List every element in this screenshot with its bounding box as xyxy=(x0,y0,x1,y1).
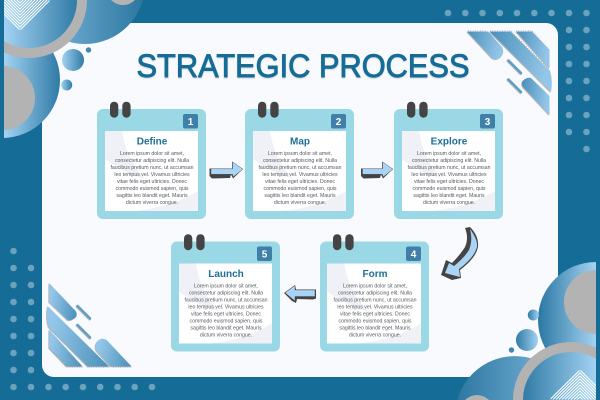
step 4 card: Form: leo tempus vel. Vivamus ultricies xyxy=(337,304,413,310)
step 1 card: Define xyxy=(97,102,206,219)
step 2 card: Map: faucibus pretium nunc, ut accumsan xyxy=(258,165,342,171)
step 2 card: Map: 2 xyxy=(336,117,342,128)
title: STRATEGIC PROCESS xyxy=(136,48,470,84)
step 4 card: Form: dictum viverra congue. xyxy=(349,332,401,338)
step 4 card: Form: consectetur adipiscing elit. Nulla xyxy=(338,290,412,296)
step 5 card: Launch: Lorem ipsum dolor sit amet, xyxy=(194,284,258,290)
step 1 card: Define: vitae felis eget ultricies. Donec xyxy=(117,179,187,185)
arrow: step 1 to step 2 xyxy=(210,162,243,178)
step 1 card: Define: commodo euismod sapien, quis xyxy=(116,186,189,192)
step 2 card: Map xyxy=(245,102,354,219)
step 1 card: Define: consectetur adipiscing elit. Nulla xyxy=(115,158,189,164)
step 1 card: Define: leo tempus vel. Vivamus ultricies xyxy=(114,172,190,178)
step 3 card: Explore: leo tempus vel. Vivamus ultricies xyxy=(411,172,487,178)
step 4 card: Form xyxy=(320,234,429,352)
step 4 card: Form: Form xyxy=(362,269,388,280)
step 2 card: Map: vitae felis eget ultricies. Donec xyxy=(265,179,335,185)
step 5 card: Launch xyxy=(171,234,280,352)
decoration: top left circles xyxy=(0,0,145,138)
step 5 card: Launch: commodo euismod sapien, quis xyxy=(190,318,263,324)
step 1 card: Define: Lorem ipsum dolor sit amet, xyxy=(120,151,184,157)
step 2 card: Map: sagittis leo blandit eget. Mauris xyxy=(264,193,336,199)
step 3 card: Explore: dictum viverra congue. xyxy=(423,200,475,206)
step 4 card: Form: sagittis leo blandit eget. Mauris xyxy=(339,326,411,332)
step 3 card: Explore: Lorem ipsum dolor sit amet, xyxy=(417,151,481,157)
arrow: step 2 to step 3 xyxy=(361,162,393,178)
step 3 card: Explore: consectetur adipiscing elit. Nulla xyxy=(412,158,486,164)
decoration: bottom right circles xyxy=(457,262,596,400)
step 1 card: Define: sagittis leo blandit eget. Mauris xyxy=(116,193,188,199)
dots: bottom left xyxy=(10,248,155,390)
step 4 card: Form: Lorem ipsum dolor sit amet, xyxy=(343,284,407,290)
step 5 card: Launch: leo tempus vel. Vivamus ultricies xyxy=(188,304,264,310)
decoration: top left bubbles xyxy=(61,47,91,90)
step 4 card: Form: vitae felis eget ultricies. Donec xyxy=(340,312,410,318)
step 5 card: Launch: sagittis leo blandit eget. Mauris xyxy=(190,326,262,332)
arrow: step 3 to step 4 (curved) xyxy=(441,227,478,280)
step 1 card: Define: 1 xyxy=(188,117,194,128)
step 3 card: Explore: vitae felis eget ultricies. Donec xyxy=(414,179,484,185)
step 2 card: Map: leo tempus vel. Vivamus ultricies xyxy=(262,172,338,178)
decoration: bottom right bubbles xyxy=(509,310,539,353)
step 5 card: Launch: 5 xyxy=(262,250,268,260)
arrow: step 4 to step 5 xyxy=(284,285,316,303)
step 3 card: Explore: commodo euismod sapien, quis xyxy=(413,186,486,192)
step 3 card: Explore xyxy=(394,102,503,219)
step 3 card: Explore: 3 xyxy=(485,117,491,128)
dots: top right xyxy=(445,10,590,152)
step 5 card: Launch: dictum viverra congue. xyxy=(200,332,252,338)
left edge stripe xyxy=(0,0,4,130)
step 5 card: Launch: faucibus pretium nunc, ut accumsan xyxy=(184,298,268,304)
step 1 card: Define: dictum viverra congue. xyxy=(126,200,178,206)
step 2 card: Map: Map xyxy=(290,136,310,148)
step 4 card: Form: faucibus pretium nunc, ut accumsan xyxy=(333,298,417,304)
step 4 card: Form: commodo euismod sapien, quis xyxy=(339,318,412,324)
step 5 card: Launch: Launch xyxy=(208,269,244,280)
step 1 card: Define: Define xyxy=(137,136,168,148)
step 3 card: Explore: Explore xyxy=(431,136,468,148)
step 3 card: Explore: faucibus pretium nunc, ut accumsan xyxy=(407,165,491,171)
step 2 card: Map: Lorem ipsum dolor sit amet, xyxy=(268,151,332,157)
step 1 card: Define: faucibus pretium nunc, ut accumsan xyxy=(110,165,194,171)
white panel xyxy=(42,23,558,377)
step 5 card: Launch: vitae felis eget ultricies. Donec xyxy=(191,312,261,318)
step 5 card: Launch: consectetur adipiscing elit. Nulla xyxy=(189,290,263,296)
step 4 card: Form: 4 xyxy=(411,250,417,260)
right edge stripe xyxy=(596,270,600,400)
step 3 card: Explore: sagittis leo blandit eget. Mauris xyxy=(413,193,485,199)
step 2 card: Map: consectetur adipiscing elit. Nulla xyxy=(263,158,337,164)
step 2 card: Map: dictum viverra congue. xyxy=(274,200,326,206)
decoration: bottom left diagonal stripes xyxy=(46,283,132,367)
decoration: top right diagonal stripes xyxy=(466,31,552,116)
step 2 card: Map: commodo euismod sapien, quis xyxy=(264,186,337,192)
